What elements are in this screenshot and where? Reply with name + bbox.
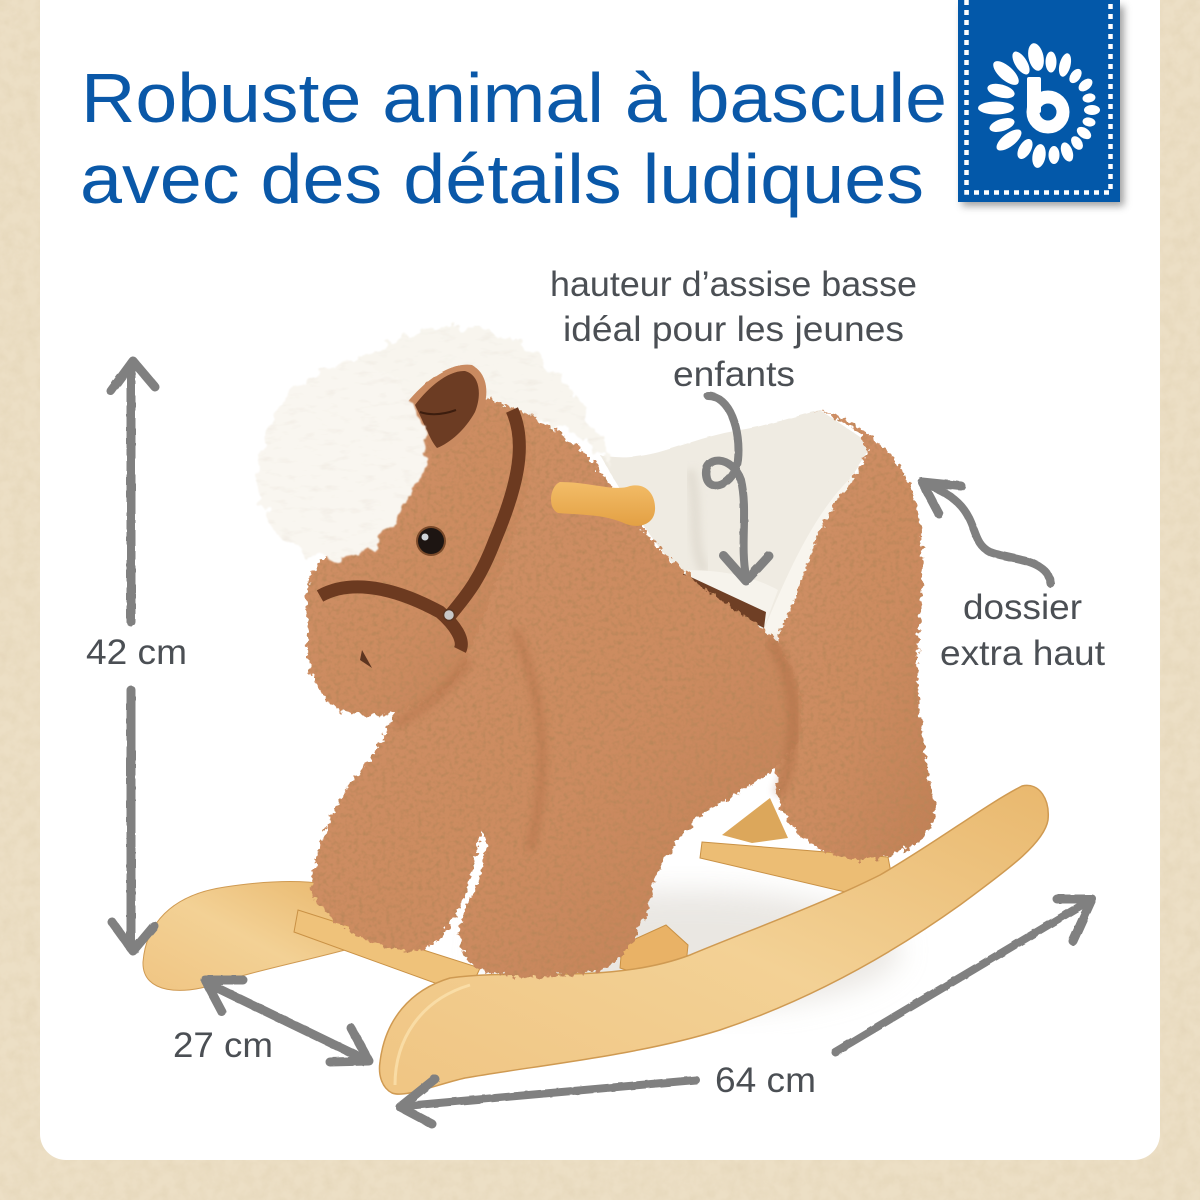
front block — [620, 925, 688, 977]
front cross bar — [294, 910, 480, 995]
torso and front legs — [312, 400, 802, 977]
title: avec des détails ludiques — [80, 140, 924, 218]
logo: blue tag with flower b — [958, 0, 1124, 206]
forelock — [258, 362, 428, 558]
floor shadow under the toy — [480, 890, 900, 1010]
haunch shading — [770, 640, 794, 795]
wavy arrow to backrest — [922, 482, 1051, 584]
back support — [722, 798, 788, 843]
horse body — [306, 395, 935, 977]
seat back and saddle — [600, 410, 872, 642]
rocker: far side — [143, 882, 345, 990]
title — [80, 59, 947, 218]
title: Robuste animal à bascule — [81, 59, 947, 137]
eye — [416, 526, 446, 556]
label: seat height — [550, 265, 917, 394]
label: 64 cm: 64 cm — [715, 1061, 816, 1100]
label: seat height: hauteur d’assise basse — [550, 265, 917, 304]
halter ring — [444, 610, 454, 620]
saddle cushion — [680, 570, 778, 625]
saddle strap — [680, 572, 766, 628]
saddle edge — [762, 468, 872, 642]
label: seat height: enfants — [673, 355, 795, 394]
label: backrest — [940, 588, 1105, 673]
halter — [320, 410, 519, 650]
back mane — [330, 327, 612, 465]
back rail — [700, 842, 892, 895]
dimension arrow: height 42 cm — [111, 361, 155, 951]
label: seat height: idéal pour les jeunes — [563, 310, 904, 349]
curly arrow to seat — [706, 396, 769, 581]
head and body shading — [395, 630, 542, 850]
label: backrest: extra haut — [940, 634, 1105, 673]
head — [306, 395, 531, 715]
dimension arrow: length 64 cm, right — [835, 899, 1092, 1052]
label: 27 cm: 27 cm — [173, 1026, 273, 1065]
label: 42 cm: 42 cm — [86, 633, 187, 672]
seat fold — [690, 470, 705, 572]
dimension arrow: length 64 cm, left — [400, 1079, 696, 1124]
nostril — [360, 650, 372, 668]
dimension arrow: width 27 cm — [205, 980, 369, 1062]
label: backrest: dossier — [963, 588, 1082, 627]
handle peg — [551, 482, 655, 526]
rocker: near side — [380, 785, 1048, 1094]
ear — [405, 365, 486, 455]
haunch — [770, 410, 935, 860]
